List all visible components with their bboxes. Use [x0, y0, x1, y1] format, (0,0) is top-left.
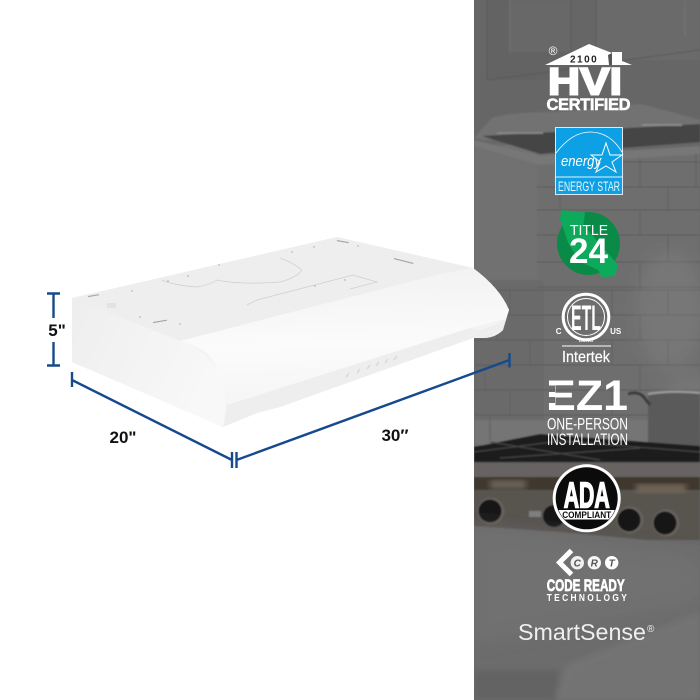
upper cabinets — [487, 0, 686, 80]
dimension: width 30 inches: 30″ — [381, 426, 409, 445]
logo: HVI certified: 2100 — [570, 54, 598, 66]
left wall column — [474, 145, 536, 232]
logo: Title 24: 24 — [569, 232, 609, 271]
steam — [640, 258, 700, 365]
logo: SmartSense: ® — [647, 624, 655, 635]
HVI letters: HVI — [548, 62, 622, 104]
panel: kitchen photo background — [474, 0, 700, 700]
cooking pot — [628, 392, 700, 446]
logo: Code Ready Technology: R — [591, 558, 599, 570]
range hood product — [72, 237, 509, 427]
range hood in photo — [474, 104, 700, 165]
dimension: width 30 inches — [236, 353, 510, 468]
logo: ETL listed Intertek: US — [610, 327, 622, 336]
dimension: depth 20 inches: 20" — [110, 428, 136, 447]
hood silhouette — [72, 237, 509, 427]
logo: ETL listed Intertek: LISTED — [579, 338, 593, 343]
logo: Energy Star: energy — [561, 153, 602, 170]
logo: EZ1 one-person installation — [548, 380, 628, 445]
logo: Code Ready Technology: C — [574, 558, 582, 570]
backsplash tile wall — [474, 150, 700, 445]
logo: SmartSense: SmartSense — [518, 619, 646, 645]
logo: Energy Star — [556, 128, 622, 194]
logo: ETL listed Intertek: C — [556, 327, 562, 336]
logo: Title 24 — [557, 210, 620, 277]
logo: Code Ready Technology: CODE READY — [547, 576, 625, 595]
logo: Energy Star: ENERGY STAR — [558, 179, 620, 194]
logo: Code Ready Technology — [547, 550, 629, 604]
logo: EZ1 one-person installation: ONE-PERSON — [547, 416, 628, 434]
logo: ETL listed Intertek — [556, 294, 622, 366]
logo: ETL listed Intertek: ETL — [571, 299, 601, 338]
dimension: height 5 inches: 5" — [48, 321, 66, 340]
stove front — [474, 462, 700, 540]
hood top surface — [72, 237, 473, 341]
hood mounting marks — [88, 240, 413, 325]
hood front fascia — [180, 268, 509, 405]
dimension: height 5 inches — [47, 294, 66, 366]
stove grates — [474, 434, 700, 463]
logo: Code Ready Technology: TECHNOLOGY — [547, 592, 629, 604]
logo: ADA compliant: ADA — [564, 474, 610, 516]
hood side face — [72, 298, 226, 427]
logo: EZ1 one-person installation: EZ1 — [546, 372, 628, 420]
logo: ADA compliant — [550, 464, 624, 532]
certified label: CERTIFIED — [546, 96, 631, 114]
logo: ETL listed Intertek: Intertek — [562, 349, 611, 366]
logo: ADA compliant: COMPLIANT — [562, 510, 612, 520]
logo: Code Ready Technology: T — [609, 558, 616, 570]
registered mark: ® — [549, 44, 558, 58]
dimension: depth 20 inches — [72, 372, 232, 468]
HVI house roof — [545, 44, 632, 65]
logo: HVI certified — [545, 44, 632, 114]
hood control buttons — [346, 356, 397, 377]
hood lower lip — [223, 319, 505, 427]
logo: Title 24: TITLE — [570, 222, 608, 239]
countertop — [474, 526, 700, 700]
logo: EZ1 one-person installation: INSTALLATION — [547, 431, 628, 449]
hood top panel lines — [162, 258, 377, 305]
